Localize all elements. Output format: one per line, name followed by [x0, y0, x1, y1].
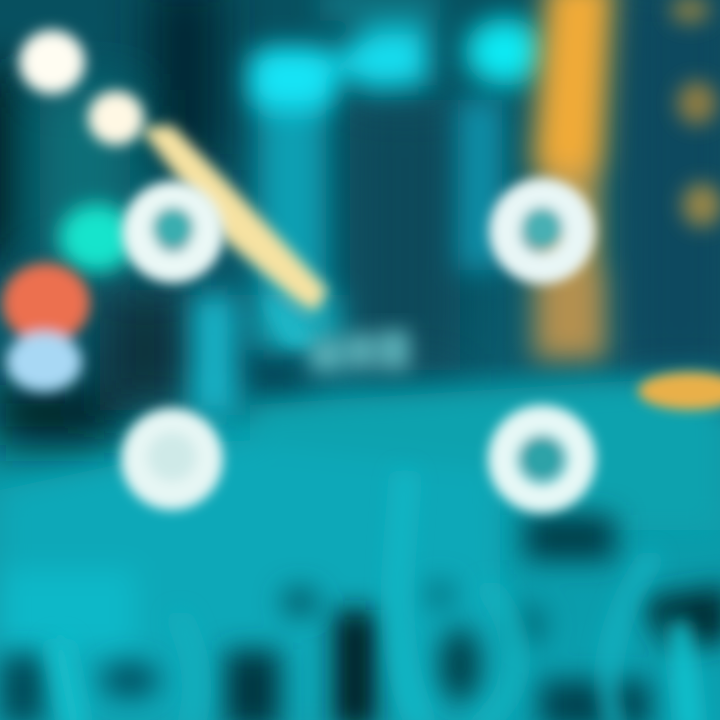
icon: ring upper right [505, 194, 579, 268]
panel: dark upper background [0, 0, 720, 445]
panel: bright cyan top blocks [250, 0, 545, 110]
text block: blurred central label [310, 330, 410, 372]
icon: large white dot [19, 30, 85, 94]
icon: amber ellipse right [638, 372, 720, 410]
panel: dark lower patches [0, 515, 720, 720]
icon: top left white dots [19, 30, 144, 145]
icon: ring lower left [121, 408, 223, 510]
panel: teal lower field [0, 375, 720, 720]
panel: right side amber dots [670, 0, 720, 227]
icon: small white dot [88, 91, 144, 145]
arrow: pale diagonal beam [140, 125, 328, 345]
panel: central cyan columns [192, 60, 502, 415]
icon: cyan green blob [59, 204, 135, 272]
panel: lower light circuit strands [60, 480, 690, 720]
icon: coral and blue pill [2, 263, 90, 392]
icon: ring upper left [138, 197, 208, 267]
icon: ring lower right [503, 420, 581, 498]
panel: orange vertical bar [532, 0, 614, 360]
